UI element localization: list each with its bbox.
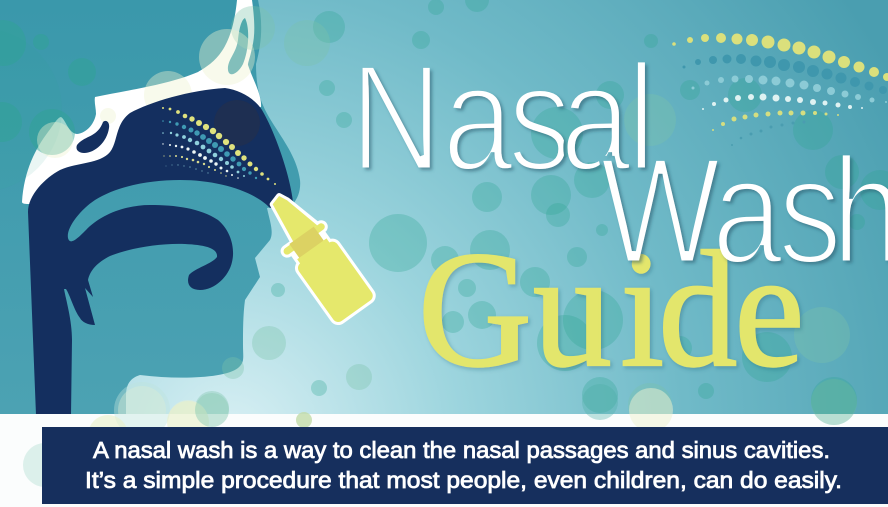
turbinate — [76, 121, 109, 153]
footer pale bubbles — [23, 379, 857, 487]
banner line 2: It’s a simple procedure that most people, even children, can do easily. — [85, 467, 842, 493]
head silhouette — [0, 0, 300, 415]
intro banner — [42, 427, 888, 504]
title: Nasal Wash — [362, 62, 888, 266]
bottle nozzle — [267, 188, 317, 242]
navy nasal airway and throat — [28, 88, 293, 415]
nasal spray dots — [162, 107, 276, 185]
bottle neck — [297, 238, 331, 266]
banner line 1: A nasal wash is a way to clean the nasal passages and sinus cavities. — [93, 437, 830, 463]
bottle collar lip — [282, 222, 326, 256]
bottle body — [296, 239, 375, 324]
shaded bubble on nasal cavity — [214, 100, 260, 146]
skull bone outline — [22, 0, 261, 204]
bottle collar band — [289, 227, 324, 259]
frontal sinus — [228, 18, 248, 74]
white footer strip — [0, 414, 888, 507]
spray bottle — [255, 184, 376, 325]
title: Guide: Guide — [418, 218, 804, 402]
decorative dot arc top right — [672, 33, 888, 146]
